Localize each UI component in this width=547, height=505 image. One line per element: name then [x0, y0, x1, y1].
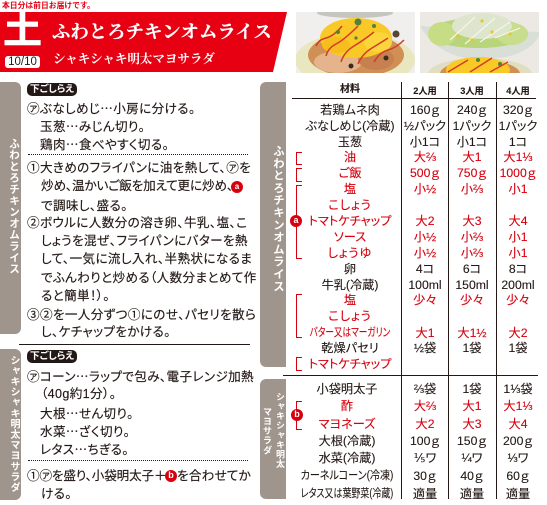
marker: group a — [290, 215, 302, 227]
row: oil: 大⅔ — [414, 150, 436, 164]
tab: omelette rice recipe — [0, 82, 21, 334]
row: mizuna: ⅓ワ — [508, 451, 528, 465]
main dish title: ふわとろチキンオムライス — [52, 22, 272, 42]
row: milk — [322, 278, 535, 292]
row: sauce: 小½ — [414, 230, 436, 244]
bracket: oil — [296, 152, 302, 165]
row: mizuna: ⅕ワ — [414, 451, 436, 465]
tab: omelette ingredients — [260, 82, 286, 367]
row: onion: 玉葱 — [338, 135, 362, 149]
serving step: ①㋐を盛り、小袋明太子＋ — [27, 469, 166, 483]
row: salt: 小1 — [509, 182, 527, 196]
row: mentaiko: ⅔袋 — [414, 382, 436, 396]
row: salt: 小⅔ — [461, 182, 483, 196]
row: chicken: 若鶏ムネ肉 — [320, 103, 380, 117]
table header — [340, 83, 530, 96]
row: corn — [301, 469, 530, 483]
row: ketchup: 大2 — [416, 214, 434, 228]
step 2 — [27, 216, 257, 303]
row: soy sauce: 小⅔ — [461, 246, 483, 260]
step 1: 炒め、温かいご飯を加えて更に炒め、 — [41, 179, 233, 193]
row: mizuna: 水菜(冷蔵) — [319, 451, 375, 465]
row: onion: 小1コ — [410, 135, 440, 149]
row: salt 2: 少々 — [506, 293, 530, 307]
row: mentaiko — [316, 382, 533, 396]
row: egg: 6コ — [463, 262, 481, 276]
day-of-week kanji: 土 — [3, 9, 42, 52]
step 3: ③②を一人分ずつ①にのせ、パセリを散ら — [27, 308, 256, 322]
bracket: ketchup — [296, 357, 302, 371]
prep label: 下ごしらえ — [30, 351, 74, 362]
row: parsley: 1袋 — [509, 341, 527, 355]
photo: mentaiko mayo salad — [420, 12, 539, 73]
row: salt 2: 少々 — [460, 293, 484, 307]
prep steps: （40g約1分）。 — [41, 387, 116, 401]
row: soy sauce: 小½ — [414, 246, 436, 260]
marker: group a: a — [293, 215, 298, 225]
step 1: で調味し、盛る。 — [41, 199, 128, 213]
step 2: でふんわりと炒める（人数分まとめて作 — [41, 271, 257, 285]
row: soy sauce: しょうゆ — [328, 246, 372, 260]
row: lettuce: 適量 — [460, 487, 484, 501]
row: chicken: 320ｇ — [503, 103, 533, 117]
row: daikon: 大根(冷蔵) — [319, 434, 375, 448]
step 1 — [27, 161, 251, 213]
prep steps — [27, 98, 195, 153]
row: shimeji — [305, 119, 537, 133]
row: parsley: ½袋 — [414, 341, 436, 355]
row: daikon — [319, 434, 533, 448]
row: mayonnaise: マヨネーズ — [319, 417, 375, 431]
table header: 4人用 — [506, 86, 530, 96]
row: lettuce — [301, 487, 530, 501]
row: shimeji: 1パック — [453, 119, 491, 133]
step 3: し、ケチャップをかける。 — [41, 325, 171, 339]
row: sauce: 小⅔ — [461, 230, 483, 244]
row: vinegar — [341, 399, 533, 413]
row: daikon: 100ｇ — [410, 434, 440, 448]
tab: salad recipe: シャキシャキ明太マヨサラダ — [8, 355, 19, 493]
row: shimeji: 1パック — [499, 119, 537, 133]
side dish title: シャキシャキ明太マヨサラダ — [53, 52, 215, 66]
row: corn: カーネルコーン(冷凍) — [301, 470, 393, 482]
step 2: して、一気に流し入れ、半熟状になるま — [41, 252, 252, 266]
row: salt 2: 塩 — [344, 293, 356, 307]
row: soy sauce: 小1 — [509, 246, 527, 260]
row: salt — [344, 182, 527, 196]
row: milk: 100ml — [408, 278, 442, 292]
row: vinegar: 大1⅓ — [503, 399, 533, 413]
tab: omelette rice recipe: ふわとろチキンオムライス — [8, 138, 20, 275]
row: shimeji: ぶなしめじ(冷蔵) — [305, 119, 395, 133]
row: sauce: ソース — [334, 230, 366, 244]
row: butter: 大2 — [509, 326, 527, 340]
marker: group b: b — [294, 409, 300, 419]
row: rice: ご飯 — [339, 166, 361, 180]
row: egg: 4コ — [416, 262, 434, 276]
row: mizuna — [318, 451, 528, 465]
panel: red header banner — [0, 9, 287, 72]
tab: omelette ingredients: ふわとろチキンオムライス — [272, 145, 284, 293]
row: egg: 8コ — [509, 262, 527, 276]
row: corn: 40ｇ — [460, 469, 484, 483]
serving step: ける。 — [41, 487, 72, 501]
row: rice: 750ｇ — [457, 166, 487, 180]
prep steps — [27, 366, 254, 458]
row: salt: 小½ — [414, 182, 436, 196]
row: butter — [310, 326, 527, 340]
row: onion: 1コ — [509, 135, 527, 149]
row: salt: 塩 — [344, 182, 356, 196]
row: mayonnaise: 大4 — [509, 417, 527, 431]
row: oil: 大1 — [463, 150, 481, 164]
ingredient group a marker: a — [235, 182, 239, 191]
row: rice — [339, 166, 536, 180]
row: mentaiko: 1袋 — [463, 382, 481, 396]
panel: omelette rice recipe text — [27, 83, 257, 339]
row: corn: 60ｇ — [506, 469, 530, 483]
row: mentaiko: 小袋明太子 — [317, 382, 377, 396]
row: lettuce: レタス又は葉野菜(冷蔵) — [301, 488, 393, 500]
tab: salad recipe — [0, 349, 21, 500]
row: sauce — [334, 230, 527, 244]
row: mentaiko: 1⅓袋 — [503, 382, 533, 396]
step 3 — [27, 308, 256, 339]
tab: salad ingredients: マヨサラダ — [262, 407, 272, 455]
row: ketchup 2: トマトケチャップ — [309, 357, 391, 371]
prep label: 下ごしらえ — [30, 84, 74, 95]
row: parsley: 乾燥パセリ — [321, 341, 379, 355]
row: chicken — [320, 103, 533, 117]
row: vinegar: 大1 — [463, 399, 481, 413]
row: butter: 大1½ — [457, 326, 487, 340]
row: salt 2 — [344, 293, 530, 307]
row: milk: 200ml — [501, 278, 535, 292]
prep steps: 水菜…ざく切り。 — [40, 421, 130, 440]
row: oil: 大1⅓ — [503, 150, 533, 164]
serving step — [27, 469, 251, 501]
row: ketchup — [309, 214, 528, 228]
prep steps: 鶏肉…食べやすく切る。 — [40, 134, 169, 153]
row: rice: 1000ｇ — [500, 166, 536, 180]
step 2: ②ボウルに人数分の溶き卵、牛乳、塩、こ — [27, 216, 247, 230]
row: mayonnaise — [319, 417, 528, 431]
row: soy sauce — [328, 246, 527, 260]
row: daikon: 150ｇ — [457, 434, 487, 448]
row: butter: バター又はマーガリン — [310, 327, 390, 339]
row: milk: 牛乳(冷蔵) — [322, 278, 378, 292]
row: salt 2: 少々 — [413, 293, 437, 307]
row: butter: 大1 — [416, 326, 434, 340]
prep steps: ㋐コーン…ラップで包み、電子レンジ加熱 — [27, 366, 254, 385]
row: egg — [344, 262, 527, 276]
bracket: rice — [296, 168, 302, 182]
marker: group b — [291, 409, 303, 421]
row: mayonnaise: 大3 — [463, 417, 481, 431]
ingredient group b marker — [165, 470, 177, 482]
row: egg: 卵 — [344, 262, 356, 276]
row: pepper 2: こしょう — [328, 309, 372, 323]
prep steps: 玉葱…みじん切り。 — [40, 116, 145, 135]
row: onion: 小1コ — [457, 135, 487, 149]
row: vinegar: 大⅔ — [414, 399, 436, 413]
serving step: を合わせてか — [177, 469, 251, 483]
tab: salad ingredients — [260, 379, 286, 499]
row: mayonnaise: 大2 — [416, 417, 434, 431]
row: lettuce: 適量 — [413, 487, 437, 501]
banner background — [0, 12, 287, 72]
row: parsley: 1袋 — [463, 341, 481, 355]
tab: salad ingredients: シャキシャキ明太 — [275, 392, 285, 469]
delivery note: 本日分は前日お届けです。 — [2, 1, 95, 10]
row: pepper: こしょう — [328, 198, 372, 212]
bracket: second seasoning group — [296, 294, 302, 338]
row: oil — [344, 150, 533, 164]
ingredients table — [283, 82, 538, 499]
row: rice: 500ｇ — [410, 166, 440, 180]
row: milk: 150ml — [455, 278, 489, 292]
step 1: ①大きめのフライパンに油を熱して、㋐を — [27, 161, 251, 175]
table header: 2人用 — [413, 86, 437, 96]
prep steps: レタス…ちぎる。 — [40, 439, 129, 458]
step 2: しょうを混ぜ、フライパンにバターを熱 — [41, 234, 248, 248]
row: sauce: 小1 — [509, 230, 527, 244]
row: chicken: 160ｇ — [410, 103, 440, 117]
date badge: 10/10 — [8, 56, 37, 68]
row: vinegar: 酢 — [341, 399, 353, 413]
row: chicken: 240ｇ — [457, 103, 487, 117]
ingredient group b marker: b — [168, 470, 174, 480]
row: ketchup: 大4 — [509, 214, 527, 228]
prep steps: ㋐ぶなしめじ…小房に分ける。 — [27, 98, 195, 117]
panel: salad recipe text — [27, 350, 254, 501]
prep steps: 大根…せん切り。 — [40, 403, 134, 422]
row: ketchup: トマトケチャップ — [309, 214, 391, 228]
row: oil: 油 — [344, 150, 356, 164]
bracket: group b — [296, 401, 302, 430]
row: corn: 30ｇ — [413, 469, 437, 483]
step 2: ると簡単！）。 — [41, 289, 110, 303]
row: shimeji: ½パック — [404, 119, 446, 133]
row: lettuce: 適量 — [506, 487, 530, 501]
row: parsley — [321, 341, 527, 355]
photo: omelette rice — [296, 12, 415, 73]
table header: 3人用 — [460, 86, 484, 96]
row: daikon: 200ｇ — [503, 434, 533, 448]
row: mizuna: ¼ワ — [462, 451, 482, 465]
ingredient group a marker — [231, 181, 243, 193]
row: onion — [338, 135, 527, 149]
row: ketchup: 大3 — [463, 214, 481, 228]
bracket: group a — [296, 185, 302, 259]
table header: 材料 — [340, 84, 360, 95]
